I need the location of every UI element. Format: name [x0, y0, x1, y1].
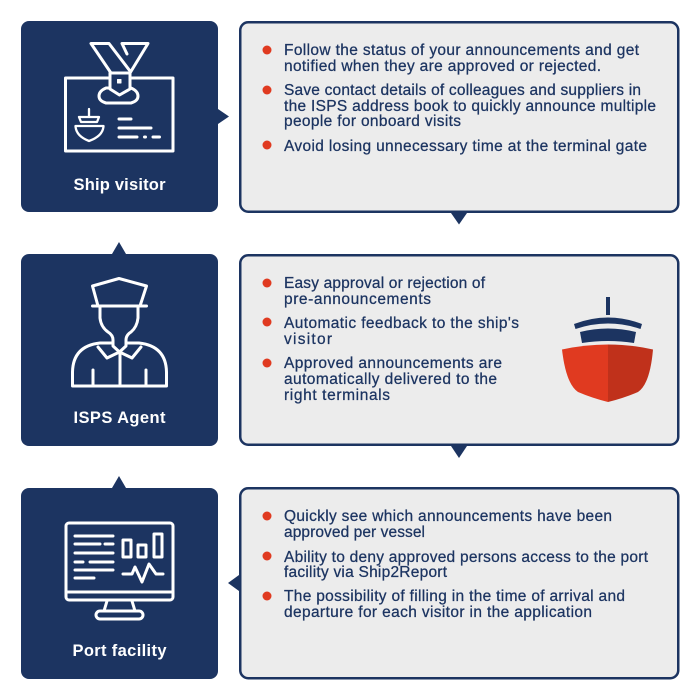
bullet 1 [262, 46, 272, 54]
panel: ISPS agent benefits [240, 255, 678, 458]
bullet 2 text [284, 82, 656, 130]
card label: Ship visitor [74, 176, 166, 194]
bullet 1 text: pre-announcements [284, 291, 431, 308]
arrow: up to previous card [112, 242, 126, 254]
bullet 2 text: visitor [284, 331, 332, 348]
bullet 3 text: automatically delivered to the [284, 371, 497, 388]
card background [21, 254, 218, 446]
bullet 3 text: right terminals [284, 387, 390, 404]
panel: ISPS agent card [21, 242, 218, 446]
bullet 3 text: Approved announcements are [284, 355, 502, 372]
bullet 2 text: Ability to deny approved persons access to the port [284, 549, 649, 566]
bullet 2 [262, 552, 272, 560]
bullet 2 text: Automatic feedback to the ship's [284, 315, 519, 332]
arrow: down to next panel [451, 446, 467, 458]
bullet 1 text [284, 275, 486, 308]
bullet 1 text: notified when they are approved or rejected. [284, 58, 601, 75]
arrow: up to previous card [112, 476, 126, 488]
icon: visitor badge [66, 44, 173, 151]
bullet 3 [262, 592, 272, 600]
bullet 3 text: Avoid losing unnecessary time at the terminal gate [284, 138, 647, 155]
card background [21, 21, 218, 212]
bullet 2 text: the ISPS address book to quickly announce multiple [284, 98, 656, 115]
arrow: left to port facility card [228, 575, 239, 591]
icon: agent with cap [72, 278, 166, 386]
bullet 1 [262, 512, 272, 520]
bullet 3 [262, 358, 272, 368]
panel: port facility benefits [228, 488, 678, 678]
bullet 3 text [284, 588, 625, 621]
arrow: down to next panel [451, 213, 467, 224]
bullet 2 text: Save contact details of colleagues and suppliers in [284, 82, 641, 99]
bullet 2 [262, 86, 272, 94]
bullet 2 text [284, 315, 519, 348]
card background [21, 488, 218, 679]
panel background [240, 488, 678, 678]
bullet 1 text: Follow the status of your announcements and get [284, 42, 640, 59]
bullet 2 text [284, 549, 649, 581]
arrow: to benefits panel [218, 109, 229, 124]
bullet 1 text [284, 508, 612, 541]
bullet 2 text: people for onboard visits [284, 113, 461, 130]
panel: ship visitor card [21, 21, 229, 212]
panel: port facility card [21, 476, 218, 679]
bullet list [262, 42, 656, 155]
bullet 1 text: Easy approval or rejection of [284, 275, 486, 292]
bullet 3 [262, 140, 272, 150]
bullet list [262, 275, 519, 404]
bullet 1 [262, 278, 272, 288]
bullet 2 [262, 318, 272, 326]
bullet list [262, 508, 649, 621]
panel background [240, 255, 678, 445]
panel background [240, 22, 678, 212]
card label: ISPS Agent [74, 409, 166, 427]
bullet 1 text: Quickly see which announcements have been [284, 508, 612, 525]
icon: monitor dashboard [66, 523, 173, 619]
bullet 3 text: The possibility of filling in the time of arrival and [284, 588, 625, 605]
bullet 3 text [284, 355, 502, 404]
bullet 3 text: departure for each visitor in the application [284, 604, 592, 621]
card label: Port facility [72, 642, 167, 660]
bullet 1 text [284, 42, 640, 75]
bullet 1 text: approved per vessel [284, 524, 425, 541]
icon: ship front view [562, 297, 653, 402]
bullet 2 text: facility via Ship2Report [284, 564, 448, 581]
panel: ship visitor benefits [240, 22, 678, 224]
